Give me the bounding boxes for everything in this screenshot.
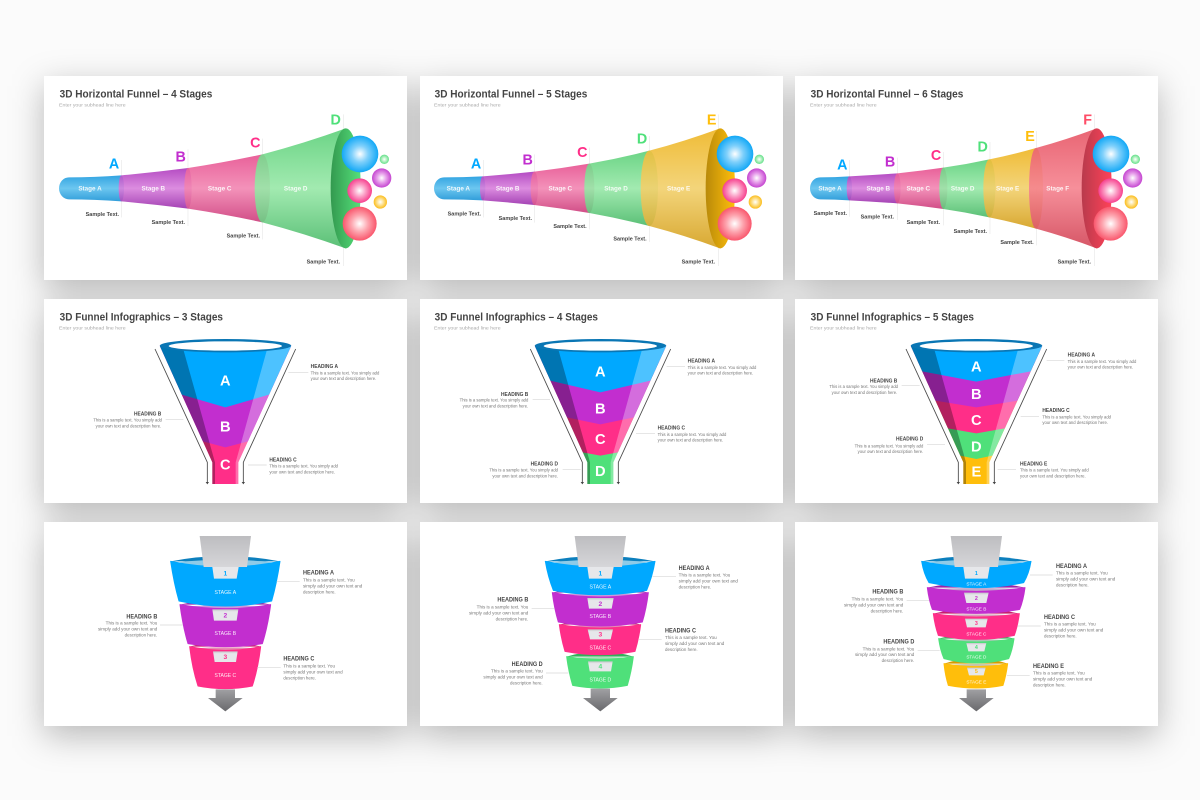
callout B	[469, 597, 554, 623]
panel: horizontal funnel 5 stages	[420, 76, 783, 280]
callout A: This is a sample text. You	[303, 577, 355, 583]
callout A	[288, 364, 380, 381]
tier A: 1	[598, 570, 602, 577]
tier D: STAGE D	[966, 655, 987, 661]
stage letters: A	[837, 157, 848, 173]
callout B: HEADING B	[501, 392, 528, 398]
tier A	[171, 536, 280, 606]
callout B: This is a sample text. You	[477, 605, 529, 611]
callout C: HEADING C	[283, 656, 315, 663]
stage letters: D	[637, 132, 647, 148]
sample captions: Sample Text.	[307, 259, 340, 265]
sample captions: Sample Text.	[86, 212, 119, 218]
callout A: description here.	[1056, 583, 1089, 589]
tier A: STAGE A	[966, 582, 987, 588]
tier C: 3	[975, 621, 978, 627]
stage labels	[78, 185, 308, 192]
panel: stacked funnel 3 stages	[44, 522, 407, 726]
callout B	[93, 412, 183, 428]
sample captions: Sample Text.	[861, 215, 894, 221]
title: 3D Funnel Infographics – 5 Stages	[811, 311, 974, 323]
stage letters: C	[577, 145, 588, 161]
callout A: HEADING A	[1056, 563, 1087, 570]
callout A	[1030, 563, 1116, 589]
funnel: C	[220, 458, 231, 474]
panel: stacked funnel 5 stages	[795, 522, 1158, 726]
funnel	[530, 339, 671, 484]
callout E: This is a sample text. You	[1033, 671, 1085, 677]
callout C: your own text and description here.	[1042, 420, 1108, 425]
callout A: HEADING A	[679, 565, 710, 572]
sample captions: Sample Text.	[682, 259, 715, 265]
funnel	[154, 339, 296, 484]
callout C: This is a sample text. You simply add	[658, 432, 727, 437]
stage letters: A	[471, 157, 481, 173]
panel: 3D funnel 3 stages	[44, 299, 407, 503]
stage letters: E	[707, 112, 716, 128]
callout E: description here.	[1033, 683, 1066, 689]
stage labels: Stage D	[951, 185, 975, 192]
callout C: This is a sample text. You simply add	[269, 464, 338, 469]
callout A: This is a sample text. You	[1056, 571, 1108, 577]
title: 3D Horizontal Funnel – 6 Stages	[811, 88, 963, 100]
callout D	[855, 639, 940, 664]
callout B: HEADING B	[134, 412, 161, 418]
callout E: HEADING E	[1033, 663, 1064, 670]
stage letters: D	[330, 112, 341, 128]
stage labels: Stage C	[208, 185, 232, 192]
tier E	[944, 658, 1008, 688]
callout E: HEADING E	[1020, 462, 1048, 468]
callout C	[257, 656, 343, 681]
callout C: This is a sample text. You	[283, 663, 335, 669]
callout B: your own text and description here.	[96, 423, 161, 428]
callout D	[489, 461, 581, 478]
callout B	[844, 589, 929, 614]
sample captions	[448, 212, 715, 265]
funnel body	[59, 128, 361, 248]
subheading: Enter your subhead line here	[434, 326, 501, 332]
sample captions: Sample Text.	[613, 237, 647, 243]
callout C: This is a sample text. You	[1044, 622, 1096, 628]
callout C	[248, 457, 338, 474]
funnel body	[810, 128, 1112, 248]
title: 3D Funnel Infographics – 3 Stages	[60, 311, 223, 323]
sample captions: Sample Text.	[1058, 259, 1091, 265]
stage letters: B	[522, 152, 533, 168]
stage letters: C	[931, 148, 941, 164]
tier E: 5	[975, 669, 978, 675]
tier D: 4	[975, 645, 978, 651]
funnel: D	[595, 464, 606, 480]
tier C	[190, 641, 261, 689]
callout C	[636, 426, 727, 443]
funnel: D	[971, 440, 982, 456]
callout D: This is a sample text. You	[491, 669, 543, 675]
callout D: your own text and description here.	[492, 473, 558, 478]
callout E: your own text and description here.	[1020, 474, 1086, 479]
callout A: your own text and description here.	[688, 371, 753, 376]
callout B: your own text and description here.	[832, 390, 897, 395]
callout D: This is a sample text. You	[863, 646, 915, 652]
callout C: HEADING C	[658, 426, 685, 432]
callout C: HEADING C	[1042, 408, 1070, 414]
stage labels: Stage A	[818, 185, 842, 192]
callout D: description here.	[510, 681, 543, 687]
callout D: HEADING D	[512, 661, 543, 668]
tier A: STAGE A	[214, 590, 237, 596]
callout A: your own text and description here.	[1068, 365, 1133, 370]
tier B: STAGE B	[589, 614, 612, 620]
callout D: simply add your own text and	[855, 652, 915, 658]
tier A: 1	[975, 571, 978, 577]
funnel: C	[971, 413, 982, 429]
tier B	[927, 582, 1025, 613]
stage letters: C	[250, 136, 261, 152]
tier A	[922, 536, 1031, 588]
tier C	[933, 608, 1019, 639]
panel: 3D funnel 5 stages	[795, 299, 1158, 503]
callout A: your own text and description here.	[311, 376, 376, 381]
bubbles	[717, 136, 766, 241]
callout B	[829, 378, 920, 395]
tier D: 4	[598, 664, 602, 671]
stage letters: B	[885, 154, 895, 170]
callout A: This is a sample text. You simply add	[311, 370, 380, 375]
tier C: 3	[598, 631, 602, 638]
callout C: description here.	[665, 647, 698, 653]
callout B: description here.	[871, 608, 903, 614]
tier D: STAGE D	[589, 677, 611, 683]
callout A: This is a sample text. You simply add	[688, 365, 757, 370]
subheading: Enter your subhead line here	[434, 103, 501, 109]
subheading: Enter your subhead line here	[810, 326, 877, 332]
stage letters	[109, 112, 341, 172]
tier B: 2	[223, 612, 227, 619]
callout B: your own text and description here.	[463, 403, 528, 408]
tier E: STAGE E	[966, 679, 987, 685]
funnel: A	[971, 359, 982, 375]
tier B: 2	[975, 596, 978, 602]
stage labels: Stage F	[1046, 185, 1069, 192]
callout D: simply add your own text and	[483, 675, 543, 681]
funnel: A	[220, 374, 231, 390]
callout D: HEADING D	[883, 639, 915, 646]
stage labels: Stage D	[284, 185, 308, 192]
sample captions: Sample Text.	[1000, 240, 1034, 246]
callout D: your own text and description here.	[858, 449, 923, 454]
callout B: HEADING B	[872, 589, 904, 596]
panel: 3D funnel 4 stages	[420, 299, 783, 503]
down arrow	[583, 689, 618, 711]
callout D: description here.	[882, 658, 914, 664]
sample captions: Sample Text.	[553, 224, 587, 230]
sample captions: Sample Text.	[814, 211, 847, 217]
callout B	[460, 392, 550, 408]
panel: horizontal funnel 4 stages	[44, 76, 407, 280]
funnel: B	[971, 387, 982, 403]
tier B: STAGE B	[966, 606, 987, 612]
callout A: HEADING A	[1068, 353, 1095, 359]
callout A	[653, 565, 738, 591]
callout C	[1018, 614, 1104, 640]
tier D	[939, 633, 1014, 663]
callout C: simply add your own text and	[1044, 628, 1104, 634]
callout A: This is a sample text. You simply add	[1068, 359, 1137, 364]
callout D: This is a sample text. You simply add	[489, 468, 558, 473]
callout B: This is a sample text. You simply add	[460, 398, 529, 403]
callout A: HEADING A	[303, 570, 334, 577]
tier C: 3	[223, 654, 227, 661]
callout C: simply add your own text and	[665, 641, 725, 647]
callout E	[1007, 663, 1093, 689]
subheading: Enter your subhead line here	[59, 326, 126, 332]
callout C: description here.	[1044, 634, 1077, 640]
callout D	[855, 437, 945, 454]
callout A	[667, 359, 757, 376]
tier D	[567, 651, 633, 688]
stage labels	[818, 185, 1069, 192]
stage labels: Stage A	[447, 185, 470, 192]
stage letters: F	[1083, 112, 1092, 128]
tier B	[552, 587, 648, 626]
callout C: your own text and description here.	[658, 438, 723, 443]
callout C	[1021, 408, 1111, 425]
sample captions: Sample Text.	[499, 216, 532, 222]
stage labels: Stage E	[667, 185, 690, 192]
sample captions	[86, 212, 340, 265]
callout B: simply add your own text and	[469, 611, 529, 617]
callout B	[98, 613, 183, 639]
callout C: your own text and description here.	[269, 469, 335, 474]
title: 3D Funnel Infographics – 4 Stages	[435, 311, 598, 323]
callout C: HEADING C	[1044, 614, 1075, 621]
callout A: simply add your own text and	[303, 583, 363, 589]
callout C: This is a sample text. You	[665, 635, 717, 641]
stage letters: E	[1025, 129, 1035, 145]
callout B: description here.	[496, 617, 528, 623]
callout C: simply add your own text and	[283, 670, 343, 676]
callout B: This is a sample text. You	[852, 596, 904, 602]
tier A: STAGE A	[589, 584, 612, 590]
stage labels	[447, 185, 690, 192]
callout B: This is a sample text. You	[106, 621, 158, 627]
callout A: simply add your own text and	[1056, 577, 1116, 583]
callout A	[277, 570, 363, 595]
funnel: B	[220, 420, 231, 436]
stage labels: Stage B	[496, 185, 520, 192]
callout C: This is a sample text. You simply add	[1042, 414, 1111, 419]
sample captions: Sample Text.	[954, 229, 987, 235]
card shadows	[44, 86, 1158, 736]
tier C: STAGE C	[214, 673, 236, 679]
stage letters	[471, 112, 716, 173]
bubbles	[1093, 136, 1142, 241]
sample captions: Sample Text.	[907, 220, 940, 226]
down arrow	[208, 689, 243, 711]
callout D: HEADING D	[531, 461, 558, 467]
stage labels: Stage D	[604, 185, 628, 192]
panel: horizontal funnel 6 stages	[795, 76, 1158, 280]
callout A: HEADING A	[688, 359, 715, 365]
stage letters	[837, 112, 1092, 173]
funnel body	[434, 128, 735, 248]
tier C: STAGE C	[589, 645, 611, 651]
callout B: This is a sample text. You simply add	[93, 418, 162, 423]
stage labels: Stage E	[996, 185, 1019, 192]
callout D: This is a sample text. You simply add	[855, 443, 924, 448]
stage labels: Stage B	[867, 185, 891, 192]
callout A	[1047, 353, 1137, 370]
callout A: description here.	[679, 585, 711, 591]
callout E	[998, 462, 1089, 479]
tier A: 1	[223, 570, 227, 577]
stage labels: Stage B	[142, 185, 166, 192]
stage labels: Stage C	[907, 185, 931, 192]
callout B: simply add your own text and	[98, 627, 158, 633]
tier B: 2	[598, 601, 602, 608]
tier B: STAGE B	[214, 631, 237, 637]
callout A: description here.	[303, 589, 336, 595]
sample captions	[814, 211, 1091, 265]
title: 3D Horizontal Funnel – 5 Stages	[435, 88, 587, 100]
callout D	[483, 661, 568, 687]
callout B: HEADING B	[870, 378, 897, 384]
sample captions: Sample Text.	[152, 220, 185, 226]
stage letters: B	[175, 149, 186, 165]
funnel: A	[595, 364, 606, 380]
stage letters: D	[977, 140, 988, 156]
callout B: HEADING B	[497, 597, 529, 604]
callout D: HEADING D	[896, 437, 923, 443]
tier C	[559, 619, 641, 655]
callout B: HEADING B	[126, 613, 158, 620]
subheading: Enter your subhead line here	[59, 103, 126, 109]
callout E: This is a sample text. You simply add	[1020, 468, 1089, 473]
stage letters: A	[109, 156, 119, 172]
bubbles	[342, 136, 391, 241]
title: 3D Horizontal Funnel – 4 Stages	[60, 88, 212, 100]
callout E: simply add your own text and	[1033, 677, 1093, 683]
funnel	[906, 339, 1047, 484]
sample captions: Sample Text.	[448, 212, 481, 218]
callout C: HEADING C	[269, 457, 297, 463]
callout B: description here.	[125, 633, 157, 639]
funnel: E	[971, 465, 981, 481]
funnel: C	[595, 432, 606, 448]
callout A: HEADING A	[311, 364, 338, 370]
tier C: STAGE C	[966, 631, 987, 637]
stage labels: Stage C	[549, 185, 573, 192]
callout B: simply add your own text and	[844, 602, 904, 608]
callout A: This is a sample text. You	[679, 573, 731, 579]
tier B	[180, 599, 271, 647]
stage labels: Stage A	[78, 185, 102, 192]
callout C: description here.	[283, 675, 316, 681]
callout C	[639, 627, 725, 653]
callout A: simply add your own text and	[679, 579, 738, 585]
callout C: HEADING C	[665, 627, 696, 634]
callout B: This is a sample text. You simply add	[829, 384, 898, 389]
tier A	[545, 536, 655, 595]
panel: stacked funnel 4 stages	[420, 522, 783, 726]
down arrow	[959, 689, 994, 711]
funnel: B	[595, 401, 606, 417]
subheading: Enter your subhead line here	[810, 103, 877, 109]
sample captions: Sample Text.	[227, 234, 260, 240]
